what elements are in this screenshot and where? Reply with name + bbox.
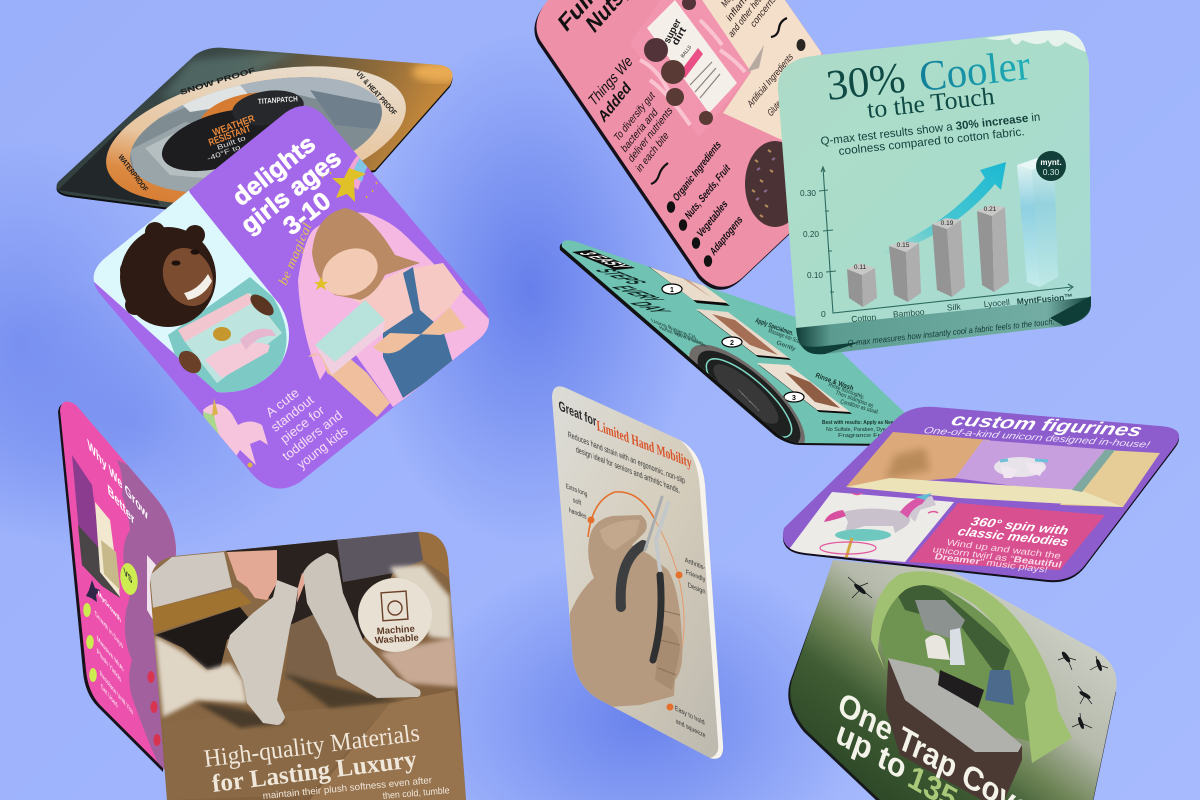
arrow [880,162,1006,254]
heading: steps every day [596,269,672,312]
checklist: Plush Yields [96,646,122,684]
cream panel [702,0,825,140]
card: why we grow better [58,402,176,772]
heading: high-quality materials [202,720,421,798]
caption: A cute standout piece [263,385,351,472]
step text: No Sulfate, Paraben, Dye and [826,427,896,433]
decoration: grey triangle [747,45,764,72]
step text: Condition as usual. [839,399,880,416]
heading: high-quality materials: High-quality Materials [202,720,421,773]
heading: great for limited hand mobility [558,397,692,472]
photo: step 1 [648,266,730,306]
axes [819,167,1073,313]
bar: cotton: 0.11 [854,264,866,271]
text: 360 spin with classic melodies [931,515,1071,575]
product pack [639,0,751,126]
step text: Using Hairy Through [732,284,766,302]
heading: great for limited hand mobility: Great for [558,397,597,430]
bar: bamboo [889,241,921,302]
ring labels: UV & HEAT PROOF [355,69,399,117]
bullet [796,39,806,51]
marks: negative points [148,671,160,746]
x-axis labels: Silk [946,301,962,313]
callout: easy to hold and squeeze: Easy to hold [675,705,705,727]
bar: myntfusion [1017,158,1058,287]
text: 360 spin with classic melodies: classic melodies [956,525,1070,549]
callout: arthritis-friendly design: Arthritis- [685,557,706,572]
body: to diversify gut [612,89,675,175]
heading: things we added: Things We [586,52,635,110]
photo: step 3 [757,363,852,414]
badge: machine washable [358,578,432,652]
step text [651,318,894,438]
bar: cotton [847,263,877,307]
step text: Fragrance Free [838,433,888,439]
card: socks lasting luxury [150,528,468,800]
heading: delights girls ages 3-10: delights [227,130,321,212]
heading: steps every day: DAY [623,301,677,314]
photo: backyard [880,585,1030,742]
callout: arthritis-friendly design: Friendly [686,569,706,584]
footer strip [796,296,1091,354]
heading: things we added: Added [596,79,634,126]
card: weather resistant roof patch [50,48,468,213]
body: to diversify gut: bacteria and [619,106,660,155]
bar chart: 0 [821,309,826,319]
badge: VS [120,563,138,595]
callout: extra long soft handles: Extra long [566,483,588,499]
step text: Rinse & Wash [814,372,854,393]
step text: Apply Precision [729,278,761,295]
heading: 30% cooler: Cooler [917,42,1032,101]
photo: back sock [303,553,421,698]
body text [567,429,686,495]
callout: easy to hold and squeeze [666,704,706,740]
card: 3 easy steps every day [560,240,904,446]
x-axis labels: Bamboo [893,307,925,319]
photo: energy ball [745,141,788,227]
heading: one trap covers up to 135: up to [832,714,911,787]
body: right column: Gluten [766,95,786,119]
body: right column: Artificial Ingredients [746,51,795,110]
heading: things we added [586,52,635,126]
patch badge [155,84,306,183]
bar: lyocell: 0.21 [984,206,997,213]
step text: Massage into Scalp [767,328,804,346]
step text: Best with results: Apply as Needed [822,420,902,426]
subheading: One-of-a-kind unicorn designed in-house! [922,425,1152,451]
panel: 360 spin [909,503,1105,570]
photo: step 2 [696,309,791,360]
bar: silk: 0.19 [941,220,954,227]
step text: Apply Specialmen. [754,317,794,338]
badge: mynt 0.30 [1036,151,1066,181]
patch badge: WEATHER [211,113,257,139]
body: to diversify gut: To diversify gut [612,89,657,144]
list: things added: Nuts, Seeds, Fruit [683,161,733,222]
photo panel: smiling girl [94,190,289,392]
photo: step 2: 2 [730,340,734,347]
frost drip [985,30,1086,52]
text: 360 spin with classic melodies: 360° spin with [969,515,1071,538]
body text: design ideal for seniors and arthritic hands. [575,444,680,495]
step text: Using Batana Oil, [651,318,699,342]
photo: hand [227,550,277,600]
card: full of nuts, things we added [534,0,840,290]
text: 360 spin with classic melodies: Dreamer ” music plays! [933,551,1049,575]
heading label: 3 easy: 3 EASY [573,251,635,269]
ring labels [116,65,399,194]
photo: music box [846,432,1160,507]
checklist: Growth in Days [94,608,123,651]
badge: mynt 0.30: 0.30 [1043,167,1060,177]
step text: Gently [775,340,796,353]
card: 30% cooler to the touch [778,30,1091,354]
photo panel: girl with box [298,208,500,417]
heading: steps every day: EVERY [605,285,670,302]
patch badge: -40°F to [206,143,242,163]
caption: A cute standout piece: A cute [263,385,302,420]
patch badge: RESISTANT [207,123,252,149]
x-axis labels: Lyocell [983,297,1010,309]
callout: easy to hold and squeeze: and squeeze [676,718,706,740]
checklist: MyGrowth [97,588,121,625]
card: limited hand mobility [552,386,723,759]
step text: Then shampoo as [834,390,874,410]
caption: A cute standout piece: standout [268,392,317,435]
bar chart [800,151,1073,324]
checklist [83,588,133,717]
body: right column [720,0,795,119]
body: to diversify gut: in each bite [634,129,671,175]
heading: 30% cooler [824,42,1032,124]
bar chart: 0.10 [807,270,823,280]
body: to diversify gut: deliver nutrients [626,104,675,165]
heading: delights girls ages 3-10: girls ages [236,144,347,239]
callout: extra long soft handles [566,483,594,524]
icon: orange arc [587,491,685,650]
card: delights girls ages 3-10 [60,106,500,489]
list: things added: Adaptogens [708,213,745,258]
list: things added: Vegetables [695,197,730,240]
step text: with Effective. [673,330,705,348]
photo: pliers [621,497,668,660]
product pack: BALLS [680,44,694,59]
heading: delights girls ages 3-10: 3-10 [278,187,336,241]
badge: machine washable: Machine [376,624,415,637]
icon: unicorn [203,398,268,470]
caption: A cute standout piece: piece for [277,402,328,446]
product pack: super [662,17,684,45]
photo: front sock [227,580,298,725]
checklist: Get Used [100,681,118,710]
body text: Reduces hand strain with an ergonomic, non-slip [567,429,686,486]
arrow ring [871,571,1072,763]
bar: silk [932,218,965,297]
text: 360 spin with classic melodies: unicorn twirl as “ Beautiful [931,544,1063,570]
checklist: Resolace Until You [99,668,133,717]
heading: 30% cooler: to the Touch [866,83,996,124]
product: jar top [688,344,805,443]
card: one trap covers [788,560,1117,800]
icon: logo star [86,580,100,602]
photo: step 3: 3 [792,395,796,402]
callout: arthritis-friendly design: Design [688,582,706,596]
icon: shooting star [322,156,378,202]
product pack: dirt [670,25,689,48]
list: things added [667,138,745,267]
body: q-max results: coolness compared to cotton fabric. [838,126,1025,158]
checklist: Massive Mult- [96,633,125,675]
heading: 30% cooler: 30% [824,55,908,110]
heading: why we grow better: Why We Grow [87,435,149,523]
heading: high-quality materials: for Lasting Luxury [210,746,419,798]
caption: A cute standout piece: young kids [294,423,351,472]
heading label: 3 easy [572,250,635,270]
card: custom figurines [783,407,1179,582]
badge: machine washable: Washable [374,632,419,647]
squiggle [651,163,668,184]
heading: great for limited hand mobility: Limited Hand Mobility [596,418,692,472]
bar chart: 0.20 [803,229,819,239]
bar: bamboo: 0.15 [897,242,910,249]
patch badge: TITANPATCH [258,94,298,106]
mosquitoes [848,577,1108,729]
photo: hand [570,515,682,707]
step text: Herbal Tips in a Sample, [659,325,709,350]
x-axis labels: Cotton [851,312,877,324]
photo: step 1: 1 [670,287,674,294]
product: jar top: SPORO [736,387,761,414]
x-axis labels [851,292,1073,324]
bar: lyocell [977,205,1009,292]
ring labels: WATERPROOF [116,153,150,194]
ring labels: SNOW PROOF [179,65,257,97]
bar chart: 0.30 [800,188,816,198]
x-axis labels: MyntFusion™ [1016,292,1073,306]
step text: Rinse thoroughly, [827,382,865,401]
text: 360 spin with classic melodies: Wind up and watch the [945,537,1062,561]
callout: extra long soft handles: soft [573,497,582,507]
callout: extra long soft handles: handles [569,507,587,521]
product: trap [886,658,1022,800]
body: q-max results: Q-max test results show a 30% increase in [820,111,1041,148]
caption: A cute standout piece: toddlers and [279,407,345,464]
heading: why we grow better: Better [107,480,136,529]
heading: custom figurines: custom figurines [949,410,1145,440]
patch badge: Built to [216,135,247,152]
callout: arthritis-friendly design [676,557,706,596]
footer strip: Q-max measures how instantly cool a fabric feels to the touch. [847,316,1055,348]
icon: small gold star [314,277,328,290]
photo panel: unicorn [787,492,954,562]
squiggle [771,18,787,37]
badge: VS: VS [123,566,133,587]
badge: mynt 0.30: mynt. [1040,158,1062,167]
step text: Hair Line [744,289,764,301]
heading: steps every day: STEPS [588,268,653,285]
list: things added: Organic Ingredients [671,138,723,204]
product pack [72,455,120,598]
script: be magical: be magical [275,220,315,287]
photo: room background [150,528,468,800]
